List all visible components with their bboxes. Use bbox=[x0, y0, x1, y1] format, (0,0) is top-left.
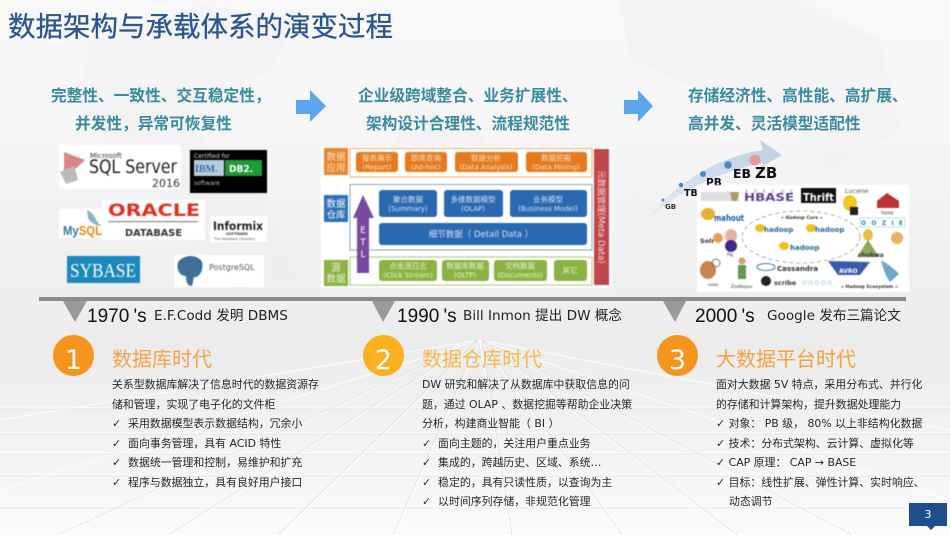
panel: hadoop ecosystem logos: AVRO bbox=[839, 268, 858, 275]
panel: hadoop ecosystem logos: hadoop bbox=[815, 226, 844, 234]
data application layer: (Data Mining) bbox=[532, 164, 580, 172]
era 2 description: ✓ 以时间序列存储，非规范化管理 bbox=[422, 495, 591, 508]
era 3 description: 动态调节 bbox=[729, 495, 773, 508]
metadata bar bbox=[594, 149, 609, 285]
panel: hadoop ecosystem logos: HAMA bbox=[708, 283, 719, 287]
page number bbox=[909, 503, 947, 530]
data application layer: 数据分析 bbox=[471, 152, 501, 162]
era 3 description: 面对大数据 5V 特点，采用分布式、并行化 bbox=[716, 378, 922, 391]
logo: IBM DB2 bbox=[190, 150, 267, 193]
era 3 number badge: 3 bbox=[669, 345, 686, 376]
data warehouse layer: (Business Model) bbox=[518, 205, 578, 213]
panel: hadoop ecosystem logos: Solr bbox=[700, 237, 715, 245]
data application layer: 应用 bbox=[326, 162, 346, 174]
era 3 heading: 大数据平台时代 bbox=[716, 347, 856, 371]
headline: big data qualities bbox=[688, 86, 908, 133]
data application layer: 数据挖掘 bbox=[541, 152, 571, 162]
data warehouse layer: 业务模型 bbox=[533, 194, 563, 204]
logo: SQL Server bbox=[59, 145, 181, 190]
headline: database qualities: 并发性，异常可恢复性 bbox=[75, 114, 232, 133]
era 3 date bbox=[695, 306, 901, 327]
logo: SQL Server: 2016 bbox=[152, 177, 180, 190]
era 1 date: 1970 's bbox=[87, 306, 147, 327]
era 1 description: ✓ 采用数据模型表示数据结构，冗余小 bbox=[112, 417, 302, 430]
headline: data warehouse qualities: 架构设计合理性、流程规范性 bbox=[366, 114, 570, 133]
era 3 description: 的存储和计算架构，提升数据处理能力 bbox=[716, 398, 901, 410]
era 2 date: 1990 's bbox=[397, 306, 457, 327]
era 1 heading: 数据库时代 bbox=[112, 347, 212, 371]
logo: MySQL bbox=[59, 209, 109, 238]
logo: IBM DB2: software bbox=[194, 180, 220, 187]
panel: hadoop ecosystem logos: HBASE bbox=[744, 191, 794, 204]
data application layer: 报表展示 bbox=[362, 152, 392, 162]
ETL arrow bbox=[353, 195, 374, 273]
panel: hadoop ecosystem logos: « Hadoop Ecosystem » bbox=[841, 284, 898, 290]
panel: hadoop ecosystem logos: scribe bbox=[774, 279, 797, 287]
era 2 description: 题，通过 OLAP 、数据挖掘等帮助企业决策 bbox=[422, 398, 632, 410]
title: 数据架构与承载体系的演变过程 bbox=[8, 11, 393, 43]
era 3 date: 2000 's bbox=[695, 306, 755, 327]
metadata bar: 元数据管理(Meta Data) bbox=[596, 170, 606, 264]
source data layer: (Documents) bbox=[497, 272, 543, 280]
data application layer: 数据 bbox=[326, 151, 346, 163]
era 1 description bbox=[112, 378, 319, 488]
era 1 description: 关系型数据库解决了信息时代的数据资源存 bbox=[112, 378, 319, 391]
logo: SQL Server: SQL Server bbox=[89, 157, 177, 178]
panel: hadoop ecosystem logos: chukwa bbox=[858, 252, 884, 259]
era 3 description: ✓ 对象： PB 级， 80% 以上非结构化数据 bbox=[716, 417, 922, 430]
headline: data warehouse qualities bbox=[358, 86, 578, 133]
logo: Informix bbox=[210, 216, 267, 242]
source data layer: 源 bbox=[331, 263, 341, 274]
era 1 date bbox=[87, 306, 288, 327]
headline: database qualities: 完整性、一致性、交互稳定性， bbox=[51, 86, 271, 105]
era 1 description: ✓ 程序与数据独立，具有良好用户接口 bbox=[112, 476, 302, 488]
logo: Oracle Database: ORACLE bbox=[108, 201, 200, 221]
source data layer: (OLTP) bbox=[454, 272, 476, 280]
era 1 description: ✓ 面向事务管理，具有 ACID 特性 bbox=[112, 436, 281, 450]
data warehouse layer: 细节数据（ Detail Data ） bbox=[429, 229, 533, 240]
era 2 description: 分析，构建商业智能（ BI ） bbox=[422, 417, 559, 430]
source data layer: 文档数据 bbox=[505, 260, 535, 270]
panel: hadoop ecosystem logos: OOZIE bbox=[861, 220, 903, 227]
logo: IBM DB2: DB2. bbox=[229, 164, 253, 175]
panel: hadoop ecosystem logos: mahout bbox=[714, 214, 744, 224]
era 2 number badge: 2 bbox=[375, 345, 392, 376]
logo: IBM DB2: IBM. bbox=[195, 164, 218, 175]
logo: PostgreSQL bbox=[174, 255, 264, 287]
source data layer: (Click Stream) bbox=[383, 272, 433, 280]
ETL arrow: T bbox=[359, 238, 366, 248]
era 3 description: ✓ 目标：线性扩展、弹性计算、实时响应、 bbox=[716, 476, 925, 488]
panel: hadoop ecosystem logos: Sqoop bbox=[881, 210, 894, 215]
era 1 description: 储和管理，实现了电子化的文件柜 bbox=[112, 398, 275, 410]
era 3 description bbox=[716, 378, 925, 508]
era 2 description: ✓ 稳定的，具有只读性质，以查询为主 bbox=[422, 476, 612, 488]
logo: Sybase: SYBASE bbox=[70, 260, 136, 282]
era 3 number badge bbox=[657, 335, 698, 376]
era 2 description bbox=[422, 378, 632, 508]
era 2 date bbox=[397, 306, 622, 327]
logo: IBM DB2: Certified for bbox=[194, 153, 230, 160]
panel: hadoop ecosystem logos: Cassandra bbox=[777, 265, 818, 273]
source data layer: 数据库数据 bbox=[446, 260, 484, 270]
panel: hadoop ecosystem logos: ZooKeeper bbox=[731, 284, 753, 289]
panel: hadoop ecosystem logos: APACHE bbox=[745, 189, 793, 195]
era 3 date: Google 发布三篇论文 bbox=[767, 308, 901, 324]
panel: hadoop ecosystem logos: hadoop bbox=[790, 244, 819, 252]
data warehouse layer: (OLAP) bbox=[461, 205, 485, 213]
ETL arrow: L bbox=[360, 250, 366, 260]
data warehouse layer: 仓库 bbox=[326, 209, 346, 221]
source data layer: 其它 bbox=[562, 265, 578, 275]
data warehouse layer bbox=[324, 184, 592, 250]
source data layer: 点击流日志 bbox=[389, 260, 427, 270]
era 3 description: ✓ CAP 原理： CAP → BASE bbox=[716, 456, 856, 469]
panel: big data growth curve: GB bbox=[665, 203, 676, 211]
headline: big data qualities: 存储经济性、高性能、高扩展、 bbox=[688, 86, 908, 105]
data application layer: 即席查询 bbox=[411, 152, 441, 162]
panel: hadoop ecosystem logos: Pig bbox=[727, 252, 733, 257]
era 2 number badge bbox=[363, 335, 404, 376]
panel: hadoop ecosystem logos: hadoop bbox=[764, 226, 793, 234]
era 1 number badge: 1 bbox=[65, 345, 82, 376]
headline: data warehouse qualities: 企业级跨域整合、业务扩展性、 bbox=[358, 86, 578, 105]
data application layer bbox=[324, 148, 592, 177]
logo: Oracle Database bbox=[102, 200, 205, 240]
panel: big data growth curve: PB bbox=[706, 177, 722, 189]
era 3 description: ✓ 技术：分布式架构、云计算、虚拟化等 bbox=[716, 436, 914, 450]
headline: database qualities bbox=[51, 86, 271, 133]
headline: big data qualities: 高并发、灵活模型适配性 bbox=[688, 114, 861, 133]
logo: SQL Server: Microsoft bbox=[90, 152, 122, 160]
panel: big data growth curve: EB bbox=[733, 166, 751, 181]
panel: hadoop ecosystem logos: Thrift bbox=[803, 191, 834, 204]
logo: Informix: Informix bbox=[213, 219, 264, 233]
data warehouse layer: (Summary) bbox=[388, 205, 428, 213]
era 2 heading: 数据仓库时代 bbox=[422, 347, 542, 371]
logo: Oracle Database: DATABASE bbox=[125, 228, 182, 239]
data warehouse layer: 多维数据模型 bbox=[450, 194, 496, 204]
era 2 date: Bill Inmon 提出 DW 概念 bbox=[463, 308, 622, 324]
page number: 3 bbox=[924, 508, 932, 521]
source data layer: 数据 bbox=[326, 273, 346, 285]
logo: Informix: SOFTWARE bbox=[226, 232, 248, 236]
logo: Informix: The database company bbox=[213, 237, 255, 241]
data application layer: (Data Analysis) bbox=[459, 164, 513, 172]
era 2 description: ✓ 面向主题的，关注用户重点业务 bbox=[422, 436, 591, 450]
ETL arrow: E bbox=[360, 226, 366, 236]
data warehouse layer: 聚合数据 bbox=[393, 194, 423, 204]
era 1 number badge bbox=[53, 335, 94, 376]
panel: big data growth curve: TB bbox=[684, 188, 698, 199]
panel: hadoop ecosystem logos: Lucene bbox=[845, 187, 868, 195]
era 2 description: ✓ 集成的，跨越历史、区域、系统… bbox=[422, 456, 601, 469]
era 2 description: DW 研究和解决了从数据库中获取信息的问 bbox=[422, 378, 630, 391]
source data layer bbox=[324, 257, 592, 286]
era 1 date: E.F.Codd 发明 DBMS bbox=[154, 308, 288, 324]
data warehouse layer: 数据 bbox=[326, 198, 346, 210]
panel: hadoop ecosystem logos: « Hadoop Core » bbox=[781, 215, 823, 221]
panel: big data growth curve: ZB bbox=[755, 164, 777, 182]
data application layer: (Report) bbox=[363, 164, 392, 172]
logo: PostgreSQL: PostgreSQL bbox=[209, 263, 255, 272]
data application layer: (Ad-hoc) bbox=[411, 164, 441, 172]
logo: MySQL: MySQL bbox=[63, 223, 102, 238]
panel: hadoop ecosystem logos: ooooo bbox=[802, 278, 832, 287]
era 1 description: ✓ 数据统一管理和控制，易维护和扩充 bbox=[112, 456, 302, 469]
